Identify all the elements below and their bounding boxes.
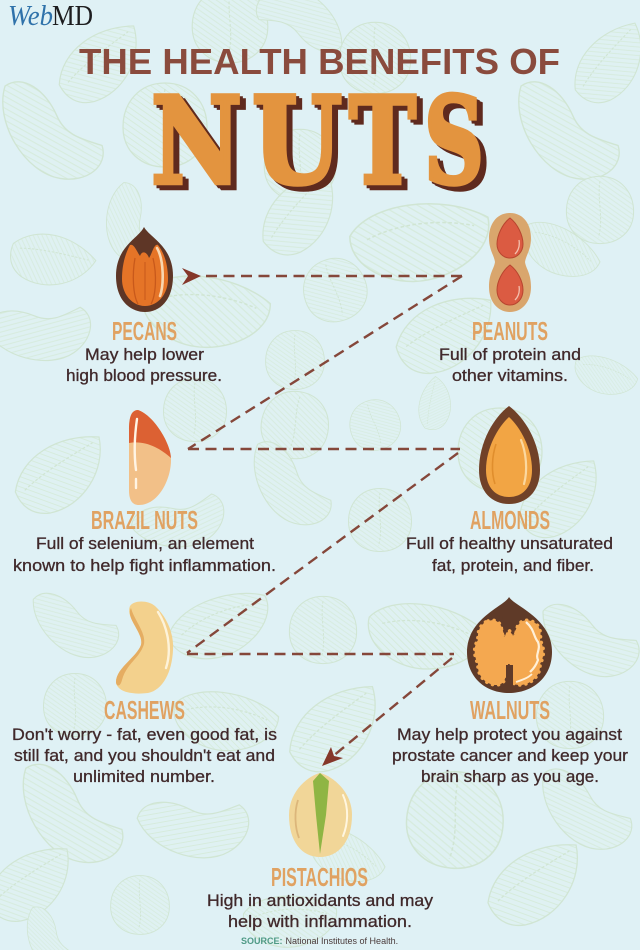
label: peanuts (439, 316, 581, 385)
logo: WebMD: MD (52, 1, 93, 32)
label: almonds: ALMONDS (470, 505, 550, 535)
dashed connector arrows (187, 276, 462, 757)
label: cashews: unlimited number. (73, 768, 215, 786)
title: NUTS: T (355, 76, 422, 217)
title: NUTS: T (352, 74, 419, 215)
logo: WebMD (8, 1, 93, 32)
label: peanuts: other vitamins. (452, 367, 568, 385)
label: cashews (12, 695, 277, 786)
label: brazil nuts: Full of selenium, an element (36, 535, 254, 553)
label: walnuts: prostate cancer and keep your (392, 747, 629, 765)
icon: almond (479, 406, 540, 504)
label: cashews: Don't worry - fat, even good fat, is (12, 726, 277, 744)
label: walnuts: May help protect you against (397, 726, 622, 744)
title: NUTS: T (349, 71, 416, 212)
title: NUTS: S (430, 76, 490, 217)
arrow head: to pistachios (322, 747, 343, 766)
title: NUTS: N (157, 76, 248, 217)
title: NUTS: S (424, 71, 484, 212)
label: almonds: fat, protein, and fiber. (432, 557, 594, 575)
icon: pecan (116, 227, 173, 312)
label: cashews: still fat, and you shouldn't eat and (14, 747, 275, 765)
label: pistachios: High in antioxidants and may (207, 892, 434, 910)
label: brazil nuts: known to help fight inflammation. (13, 557, 276, 575)
icon: brazil nut (129, 410, 171, 505)
label: walnuts (392, 695, 629, 786)
title: NUTS (151, 71, 490, 217)
title: NUTS: U (255, 74, 345, 215)
label: almonds: Full of healthy unsaturated (406, 535, 613, 553)
label: almonds (406, 505, 613, 575)
icon: peanut (489, 213, 531, 312)
arrow head: to pecans (182, 268, 201, 285)
label: pecans: high blood pressure. (66, 367, 222, 385)
title: NUTS: U (258, 76, 348, 217)
label: peanuts: PEANUTS (472, 316, 548, 346)
source line: SOURCE: National Institutes of Health. (241, 936, 398, 946)
label: pistachios: help with inflammation. (228, 913, 412, 931)
label: pecans: May help lower (85, 346, 205, 364)
label: brazil nuts (13, 505, 276, 575)
title: NUTS: U (252, 71, 342, 212)
icon: cashew (116, 602, 173, 694)
label: peanuts: Full of protein and (439, 346, 581, 364)
label: pecans: PECANS (112, 316, 177, 346)
icon: walnut (467, 597, 552, 693)
logo: WebMD: Web (8, 1, 53, 32)
icon: pistachio (289, 773, 352, 857)
label: pistachios: PISTACHIOS (271, 862, 368, 892)
label: cashews: CASHEWS (104, 695, 185, 725)
title: NUTS: N (154, 74, 245, 215)
label: walnuts: WALNUTS (470, 695, 550, 725)
title: NUTS: S (427, 74, 487, 215)
label: brazil nuts: BRAZIL NUTS (91, 505, 198, 535)
label: pistachios (207, 862, 434, 931)
title line: THE HEALTH BENEFITS OF (79, 41, 560, 82)
label: walnuts: brain sharp as you age. (421, 768, 599, 786)
label: pecans (66, 316, 222, 385)
title: NUTS: N (151, 71, 242, 212)
